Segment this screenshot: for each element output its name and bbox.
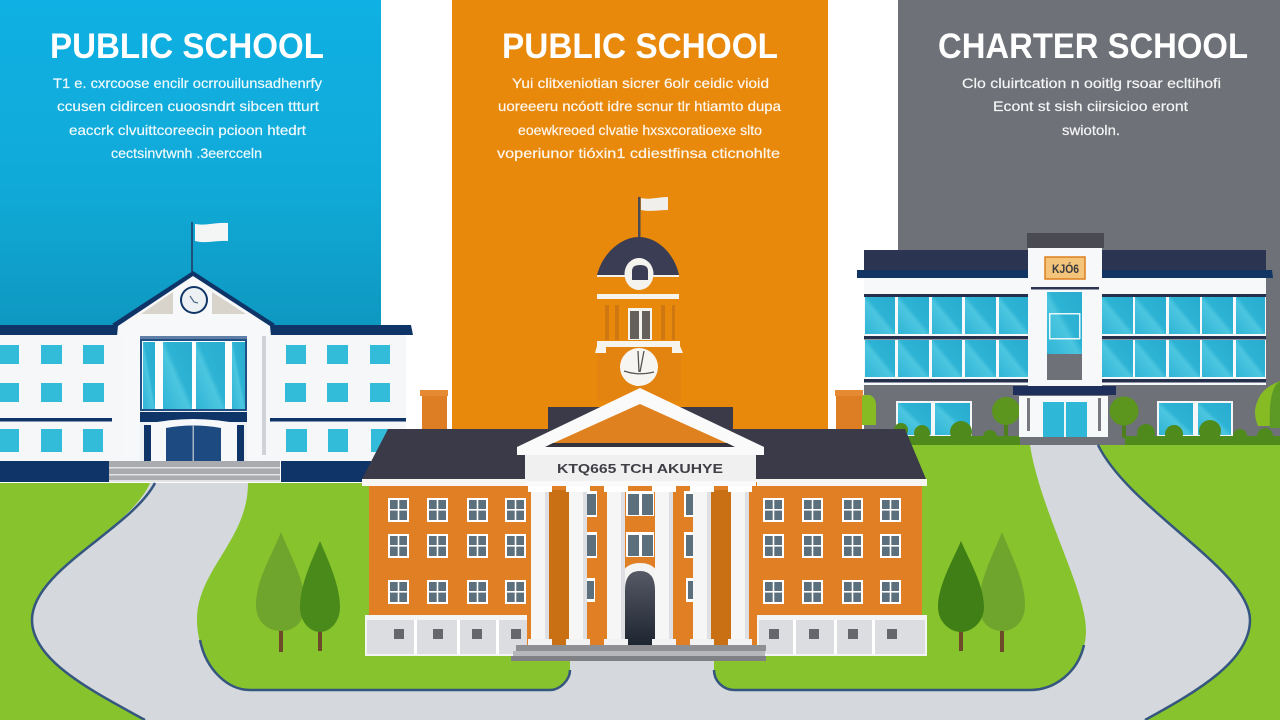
panel: orange public school xyxy=(452,0,828,432)
building: right charter school xyxy=(857,233,1280,445)
entrance xyxy=(1013,386,1116,437)
portico xyxy=(122,330,266,457)
entablature xyxy=(525,453,756,486)
glass row top bars xyxy=(864,294,1266,382)
wall xyxy=(0,335,406,461)
icon: clock xyxy=(180,286,208,314)
pediment xyxy=(112,271,275,336)
text block: gray panel xyxy=(962,75,1221,138)
portico recess xyxy=(527,482,757,647)
trees: right xyxy=(938,532,1025,652)
steps xyxy=(109,461,280,482)
arched door xyxy=(621,563,659,645)
tower window xyxy=(628,308,652,340)
entablature: KTQ665 TCH AKUHYE xyxy=(557,461,723,476)
upper windows xyxy=(0,345,391,452)
roof bars xyxy=(0,325,413,335)
curved road xyxy=(32,445,1250,720)
panel: gray charter school xyxy=(898,0,1280,446)
text block: gray panel: Clo cluirtcation n ooitlg rsoar ecltihofi xyxy=(962,75,1221,91)
upper roof xyxy=(548,407,733,437)
text block: orange panel: uoreeeru ncóott idre scnur tlr htiamto dupa xyxy=(498,98,781,114)
right base xyxy=(757,615,927,656)
glass left xyxy=(865,297,1029,377)
lower wall xyxy=(864,384,1266,442)
text block: orange panel: voperiunor tióxin1 cdiestfinsa cticnohlte xyxy=(497,145,780,161)
clock tower xyxy=(595,197,683,401)
white fascia xyxy=(864,278,1266,385)
dome window xyxy=(624,258,654,290)
steps xyxy=(511,645,766,661)
pediment xyxy=(517,388,764,455)
sign xyxy=(1045,257,1085,279)
text block: orange panel: Yui clitxeniotian sicrer 6olr ceidic vioid xyxy=(512,75,769,91)
central glass xyxy=(140,330,247,462)
text block: blue panel: ccusen cidircen cuoosndrt sibcen ttturt xyxy=(57,98,319,114)
heading: blue panel: PUBLIC SCHOOL xyxy=(50,27,324,66)
icon: flag xyxy=(191,222,228,272)
trees and bushes xyxy=(862,381,1280,445)
columns xyxy=(528,485,752,645)
heading: orange panel: PUBLIC SCHOOL xyxy=(502,27,778,66)
trees: left xyxy=(256,532,340,652)
left base xyxy=(365,615,530,656)
building: center public school xyxy=(362,197,927,661)
sign: KJÓ6 xyxy=(1052,261,1079,276)
text block: orange panel xyxy=(497,75,781,161)
eaves xyxy=(857,270,1273,278)
text block: blue panel xyxy=(53,75,322,161)
text block: gray panel: swiotoln. xyxy=(1062,122,1120,138)
base xyxy=(0,461,371,482)
building: left public school xyxy=(0,222,413,482)
upper roof xyxy=(864,250,1266,271)
text block: blue panel: eaccrk clvuittcoreecin pcioon htedrt xyxy=(69,122,306,138)
lawn xyxy=(0,445,1280,720)
heading: gray panel: CHARTER SCHOOL xyxy=(938,27,1248,66)
icon: flag xyxy=(638,197,668,237)
glass right xyxy=(1102,297,1265,377)
main roof xyxy=(362,429,926,479)
text block: orange panel: eoewkreoed clvatie hxsxcoratioexe slto xyxy=(518,122,762,138)
icon: clock xyxy=(620,348,658,386)
chimneys xyxy=(420,390,863,440)
panel: blue public school xyxy=(0,0,381,335)
dome xyxy=(597,237,679,275)
right wing windows xyxy=(763,498,901,604)
lower windows xyxy=(896,401,1233,436)
text block: blue panel: T1 e. cxrcoose encilr ocrrouilunsadhenrfy xyxy=(53,75,322,91)
floor stripes xyxy=(0,418,406,422)
cornice xyxy=(362,479,927,486)
text block: gray panel: Econt st sish ciirsicioo eront xyxy=(993,98,1188,114)
tower bands xyxy=(595,294,683,353)
tower columns xyxy=(605,305,675,340)
text block: blue panel: cectsinvtwnh .3eercceln xyxy=(111,145,262,161)
center tower xyxy=(1027,233,1104,386)
road edge lines xyxy=(32,445,1250,720)
brick body xyxy=(369,486,922,618)
left wing windows xyxy=(388,498,526,604)
